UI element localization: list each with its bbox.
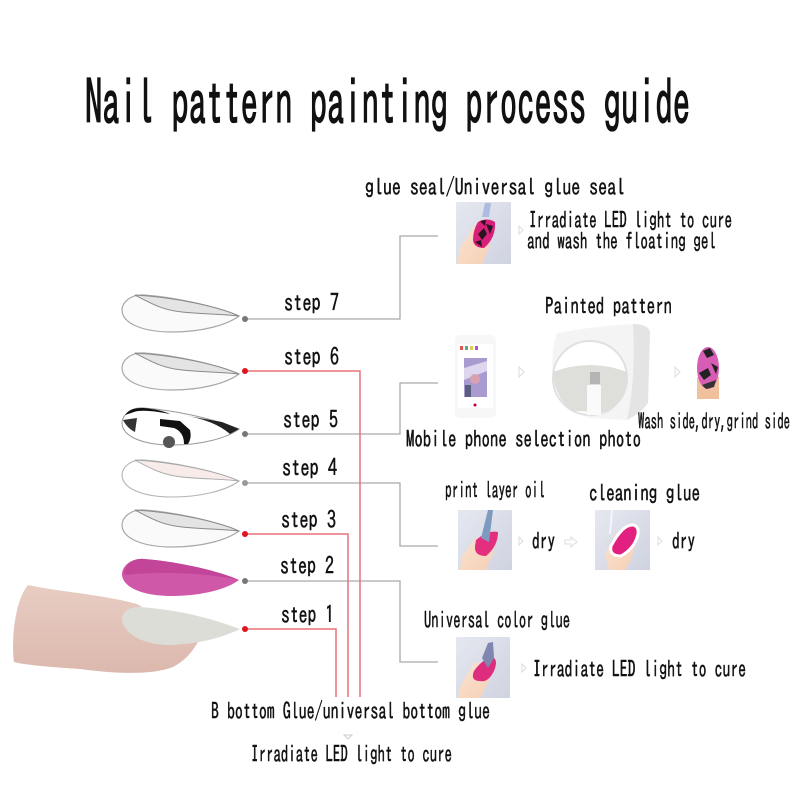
nail: step 3 (122, 510, 248, 547)
step labels: step 7 (284, 290, 339, 314)
heading: print layer oil: print layer oil (445, 478, 545, 501)
text: mobile phone selection: Mobile phone selection photo (406, 427, 641, 450)
text: bottom glue: B bottom Glue/universal bottom glue (211, 699, 490, 722)
step labels: step 3 (281, 507, 336, 531)
nail: step 2 pink (122, 559, 248, 596)
photo: cleaning glue (595, 510, 650, 570)
arrows: pattern row (519, 367, 680, 377)
step labels: step 1 (281, 602, 334, 626)
nail: step 4 (122, 460, 248, 497)
step labels: step 4 (282, 455, 337, 479)
arrow: glue seal (519, 226, 523, 234)
step labels (280, 290, 339, 626)
finger with base nail, step 1 (13, 585, 248, 673)
heading: painted pattern: Painted pattern (545, 294, 672, 317)
step labels: step 2 (280, 553, 334, 577)
nail result (697, 347, 719, 399)
connector lines: red (245, 371, 360, 697)
connector lines: grey (245, 236, 438, 662)
phone (455, 335, 496, 418)
text: cure and wash (527, 208, 732, 252)
photo: glue seal finger (456, 202, 511, 264)
heading: cleaning glue: cleaning glue (589, 481, 700, 504)
text and arrows: dry: dry (532, 529, 555, 552)
text: irradiate, bottom: Irradiate LED light to cure (251, 742, 452, 765)
nail: step 5 patterned (122, 408, 248, 448)
arrow: down (344, 735, 352, 739)
photo: universal color glue (456, 637, 510, 698)
arrow: color glue (522, 664, 526, 672)
heading: glue seal: glue seal/Universal glue seal (365, 175, 625, 198)
step labels: step 6 (284, 344, 339, 368)
printer (552, 324, 650, 420)
text and arrows: dry (519, 529, 695, 552)
text and arrows: dry: dry (672, 529, 695, 552)
nail: step 7 (122, 295, 248, 332)
photo: print layer oil (458, 510, 512, 570)
heading: universal color glue: Universal color glue (424, 608, 570, 631)
step labels: step 5 (283, 407, 338, 431)
nail: step 6 (122, 353, 248, 390)
